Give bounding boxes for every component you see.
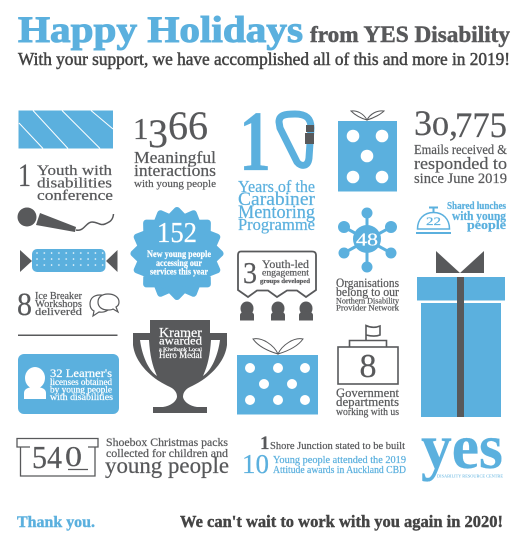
icon: microphone [18, 208, 114, 232]
emails text [414, 142, 507, 187]
emails number: 0 [432, 112, 449, 141]
panel: learner licenses [18, 354, 119, 414]
carabiner text: Carabiner [238, 190, 315, 210]
badge text: New young people [147, 250, 211, 260]
license text: with disabilities [50, 392, 114, 402]
interactions text [134, 148, 216, 190]
icon: trophy [133, 320, 227, 413]
icon: network [338, 208, 397, 272]
workshop count: 8 [17, 287, 32, 323]
panel: organisations network [336, 208, 400, 312]
shoebox text: Shoebox Christmas packs [106, 437, 229, 449]
interactions number: 66 [168, 103, 208, 148]
departments text: departments [336, 395, 399, 409]
network text: Northern Disability [336, 296, 399, 306]
icon: large gift box [417, 251, 505, 417]
workshop text: delivered [35, 306, 83, 318]
trophy text: Kramer [159, 326, 202, 341]
icon: carabiner [279, 114, 314, 165]
panel: shared lunches [416, 201, 506, 233]
groups text [260, 257, 310, 285]
emails number: 3 [414, 103, 432, 143]
icon: gift with five dots [338, 111, 397, 192]
emails number: 775 [455, 105, 507, 145]
panel: attitude awards: Young people attended the 2019 [273, 455, 406, 466]
bell number: 22 [426, 214, 441, 228]
trophy text: Hero Medal [159, 351, 202, 361]
interactions text: interactions [134, 161, 216, 180]
workshop text [35, 290, 83, 318]
shoebox text [105, 437, 229, 478]
lunches text: with young [452, 208, 506, 223]
badge text [147, 250, 211, 278]
interactions text: Meaningful [134, 148, 216, 167]
icon: three people [240, 302, 313, 320]
subtitle: With your support, we have accomplished all of this and more in 2019! [18, 49, 510, 69]
workshop text: Workshops [35, 298, 82, 310]
panel: attitude awards: Attitude awards in Auckland CBD [273, 465, 406, 476]
departments text: working with us [336, 407, 399, 418]
conference count: 1 [18, 158, 31, 194]
panel: meaningful interactions [133, 103, 216, 190]
shoebox text: collected for children and [106, 448, 228, 460]
shoebox number: 0 [65, 442, 82, 473]
panel: emails [414, 103, 507, 187]
carabiner text: Mentoring [238, 203, 315, 223]
conference text: Youth with [37, 163, 113, 179]
icon: striped wrapping paper [18, 110, 113, 148]
carabiner text: Programme [238, 215, 315, 234]
departments text [336, 386, 400, 418]
panel: ice breaker workshops [17, 287, 119, 323]
license text: by young people [50, 384, 112, 394]
badge text: accessing our [156, 259, 203, 269]
network text: Organisations [336, 276, 399, 290]
icon: podium with flag [338, 326, 398, 384]
title: Happy Holidays [18, 10, 303, 51]
panel: carabiner mentoring [238, 93, 315, 234]
groups text: Youth-led [262, 257, 309, 271]
trophy text: awarded [159, 334, 202, 348]
groups number: 3 [243, 255, 257, 290]
footer left: Thank you. [17, 514, 95, 531]
title suffix: from YES Disability [310, 22, 510, 47]
panel: attitude awards: 10 [242, 449, 269, 479]
icon: shoebox [17, 438, 98, 476]
emails text: Emails received & [414, 142, 507, 157]
departments number: 8 [360, 348, 376, 385]
carabiner text [238, 177, 315, 234]
interactions number: 1 [133, 111, 148, 146]
network text: Provider Network [336, 304, 399, 312]
logo: yes: DISABILITY RESOURCE CENTRE [437, 474, 503, 478]
shoebox number: 54 [32, 439, 62, 475]
groups text: groups developed [260, 278, 310, 285]
conference text: disabilities [37, 176, 112, 192]
panel: shore junction: 1 [260, 433, 270, 454]
groups text: engagement [262, 268, 310, 278]
starburst [134, 210, 220, 297]
license text [50, 366, 114, 402]
conference text [37, 163, 113, 204]
network text [336, 276, 400, 312]
icon: gift with eight dots [237, 339, 318, 414]
lunches text [447, 201, 506, 232]
license text: 32 Learner's [50, 366, 112, 380]
icon: person [24, 367, 46, 399]
icon: speech bubbles [90, 294, 119, 316]
panel: new young people badge [134, 210, 220, 297]
license text: licenses obtained [50, 377, 112, 387]
panel: shoebox packs [17, 437, 229, 478]
trophy text [159, 326, 203, 361]
network number: 48 [356, 230, 378, 250]
network text: belong to our [336, 285, 400, 299]
emails number [414, 103, 507, 145]
logo: yes: yes [421, 412, 503, 482]
panel: government departments [336, 326, 400, 418]
panel: shore junction [260, 433, 405, 454]
panel: conference [18, 110, 113, 204]
lunches text: people [467, 217, 506, 232]
workshop text: Ice Breaker [35, 290, 82, 302]
carabiner text: Years of the [238, 177, 315, 196]
interactions number: 3 [148, 111, 168, 156]
header [18, 10, 510, 69]
conference text: conference [37, 188, 113, 204]
trophy text: a Kiwibank Local [159, 347, 203, 353]
emails number: , [449, 103, 458, 143]
shoebox text: young people [105, 453, 229, 478]
departments text: Government [336, 386, 400, 400]
emails text: since June 2019 [414, 171, 507, 187]
panel: shore junction: Shore Junction stated to be built [270, 441, 405, 452]
lunches text: Shared lunches [447, 201, 506, 212]
interactions text: with young people [134, 178, 216, 190]
big number one: 1 [239, 93, 271, 189]
badge text: services this year [150, 268, 209, 278]
footer right: We can't wait to work with you again in 2020! [180, 512, 503, 531]
badge number: 152 [157, 218, 197, 249]
panel: youth-led groups [238, 252, 316, 320]
panel: trophy [133, 320, 227, 413]
panel: attitude awards [242, 449, 406, 479]
emails text: responded to [414, 154, 507, 173]
icon: service bell [416, 208, 451, 233]
divider [18, 334, 118, 336]
speech frame [238, 252, 316, 297]
icon: wrapped candy [20, 249, 118, 272]
shoebox number [32, 439, 82, 475]
